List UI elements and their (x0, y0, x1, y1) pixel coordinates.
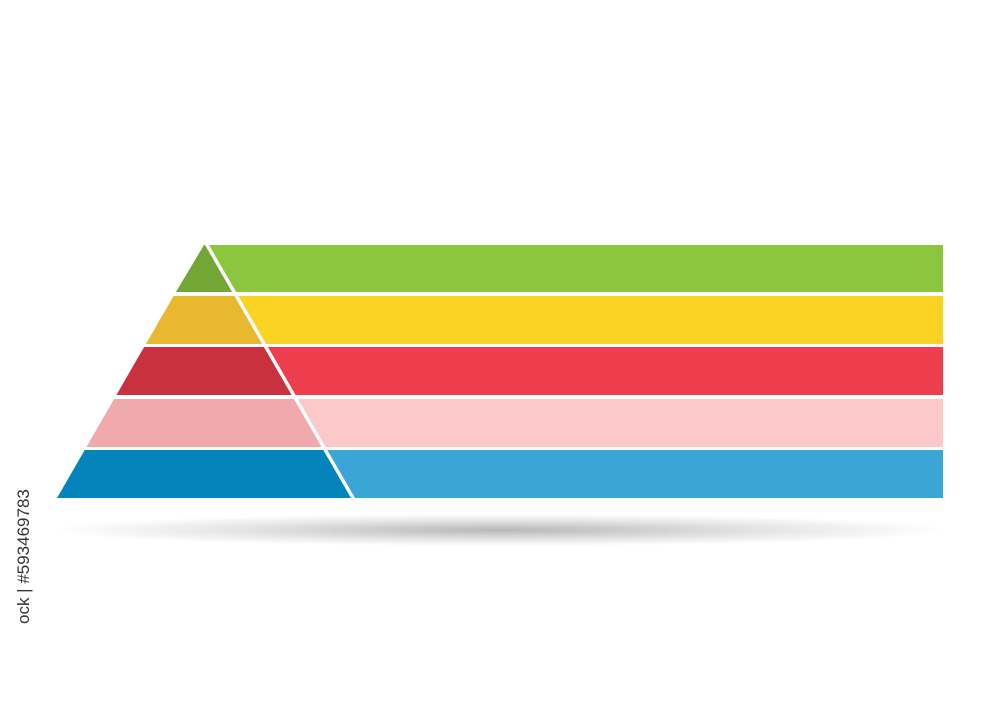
band 1: green (176, 245, 943, 292)
band 3: red (116, 347, 943, 395)
watermark id text: ock | #593469783 (14, 489, 33, 624)
band 5: blue (57, 450, 943, 498)
shadow (50, 514, 950, 546)
band 2: yellow (146, 296, 943, 344)
band 4: pink (86, 399, 943, 447)
